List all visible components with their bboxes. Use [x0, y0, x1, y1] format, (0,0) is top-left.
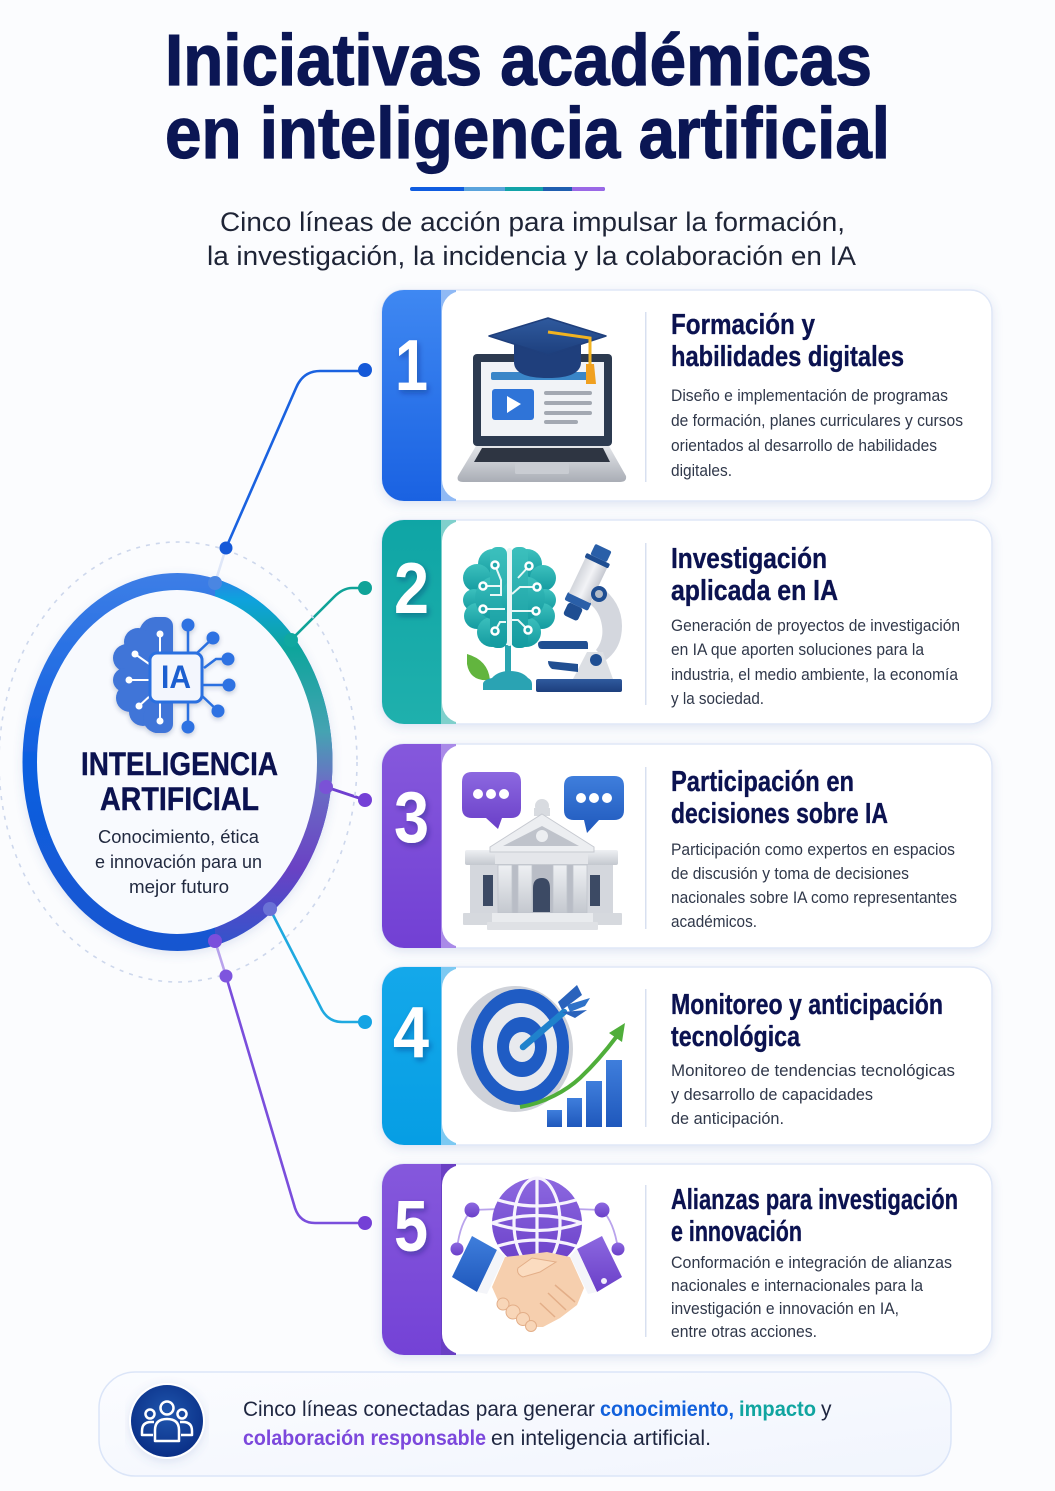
dashed orbit [0, 542, 357, 982]
heading: inteligencia artificial [81, 746, 278, 817]
heading: inteligencia artificial: INTELIGENCIA [81, 746, 278, 782]
connector dots [220, 363, 372, 1230]
panel: card 5 [382, 1164, 992, 1355]
icon: target with growth chart [457, 985, 625, 1127]
divider [645, 767, 646, 929]
footer text: Cinco líneas conectadas para generar [243, 1398, 595, 1421]
heading 3 [671, 766, 888, 830]
number 5: 5 [394, 1187, 428, 1267]
description 2: industria, el medio ambiente, la economía [671, 665, 958, 684]
central description: Conocimiento, ética [98, 826, 260, 847]
description 5: entre otras acciones. [671, 1322, 817, 1341]
heading 4: Monitoreo y anticipación [671, 989, 943, 1021]
footer text: en inteligencia artificial. [491, 1427, 711, 1450]
description 4 [671, 1061, 955, 1128]
panel: card 1 [382, 290, 992, 501]
footer text: impacto [739, 1398, 816, 1421]
ring [22, 573, 332, 951]
description 3: Participación como expertos en espacios [671, 840, 955, 859]
description 2: Generación de proyectos de investigación [671, 616, 960, 635]
subtitle: la investigación, la incidencia y la colaboración en IA [207, 241, 856, 271]
card 1 background [382, 290, 992, 501]
description 1: orientados al desarrollo de habilidades [671, 436, 937, 455]
icon: laptop with graduation cap [458, 318, 626, 482]
description 1: Diseño e implementación de programas [671, 386, 948, 405]
heading: inteligencia artificial: ARTIFICIAL [100, 781, 259, 817]
number 1: 1 [395, 326, 428, 406]
description 5: Conformación e integración de alianzas [671, 1253, 952, 1272]
description 4: de anticipación. [671, 1109, 784, 1128]
description 1 [671, 386, 963, 480]
heading 2 [671, 543, 838, 607]
description 3 [671, 840, 957, 931]
number 4: 4 [393, 993, 429, 1073]
description 3: académicos. [671, 912, 757, 931]
description 2: y la sociedad. [671, 689, 764, 708]
description 5 [671, 1253, 952, 1341]
heading 5: e innovación [671, 1216, 802, 1248]
icon: group of people [129, 1383, 205, 1459]
divider [645, 1185, 646, 1337]
number 2: 2 [394, 549, 429, 629]
heading 5: Alianzas para investigación [671, 1184, 958, 1216]
footer text: conocimiento, [600, 1398, 734, 1421]
subtitle: Cinco líneas de acción para impulsar la formación, [220, 207, 845, 237]
icon: building with speech bubbles [462, 772, 624, 930]
panel: card 2 [382, 520, 992, 724]
panel: central circle [0, 363, 372, 1230]
heading 3: Participación en [671, 766, 854, 798]
subtitle [207, 207, 856, 271]
card 4 background [382, 967, 992, 1145]
central description: mejor futuro [129, 876, 229, 897]
description 4: Monitoreo de tendencias tecnológicas [671, 1061, 955, 1080]
heading 2: Investigación [671, 543, 827, 575]
card 5 background [382, 1164, 992, 1355]
description 5: investigación e innovación en IA, [671, 1299, 899, 1318]
description 1: digitales. [671, 461, 732, 480]
heading 1: habilidades digitales [671, 341, 904, 373]
connector lines [215, 371, 365, 1223]
panel: card 3 [382, 744, 992, 948]
divider [645, 312, 646, 482]
icon: globe and handshake [450, 1178, 624, 1332]
panel: footer callout [99, 1372, 951, 1476]
icon: AI brain chip: IA [161, 659, 191, 695]
heading 5 [671, 1184, 958, 1248]
divider [645, 989, 646, 1127]
icon: brain and microscope [463, 542, 622, 692]
icon: AI brain chip [113, 617, 236, 734]
heading 3: decisiones sobre IA [671, 798, 888, 830]
panel: card 4 [382, 967, 992, 1145]
title underline [410, 187, 605, 191]
title: Iniciativas académicas [165, 21, 872, 101]
number 3: 3 [394, 778, 429, 858]
heading 4 [671, 989, 943, 1053]
description 4: y desarrollo de capacidades [671, 1085, 873, 1104]
title [165, 21, 890, 174]
central description: e innovación para un [95, 851, 262, 872]
card 3 background [382, 744, 992, 948]
ring nodes [208, 576, 333, 948]
footer text [243, 1398, 832, 1450]
description 5: nacionales e internacionales para la [671, 1276, 923, 1295]
footer text: y [821, 1398, 832, 1421]
divider [645, 543, 646, 705]
description 1: de formación, planes curriculares y cursos [671, 411, 963, 430]
description 2 [671, 616, 960, 708]
central description [95, 826, 262, 897]
card 2 background [382, 520, 992, 724]
description 2: en IA que aporten soluciones para la [671, 640, 924, 659]
heading 1: Formación y [671, 309, 815, 341]
footer background [99, 1372, 951, 1476]
title: en inteligencia artificial [165, 94, 890, 174]
description 3: nacionales sobre IA como representantes [671, 888, 957, 907]
heading 2: aplicada en IA [671, 575, 838, 607]
heading 1 [671, 309, 904, 373]
description 3: de discusión y toma de decisiones [671, 864, 909, 883]
heading 4: tecnológica [671, 1021, 801, 1053]
footer text: colaboración responsable [243, 1427, 486, 1450]
